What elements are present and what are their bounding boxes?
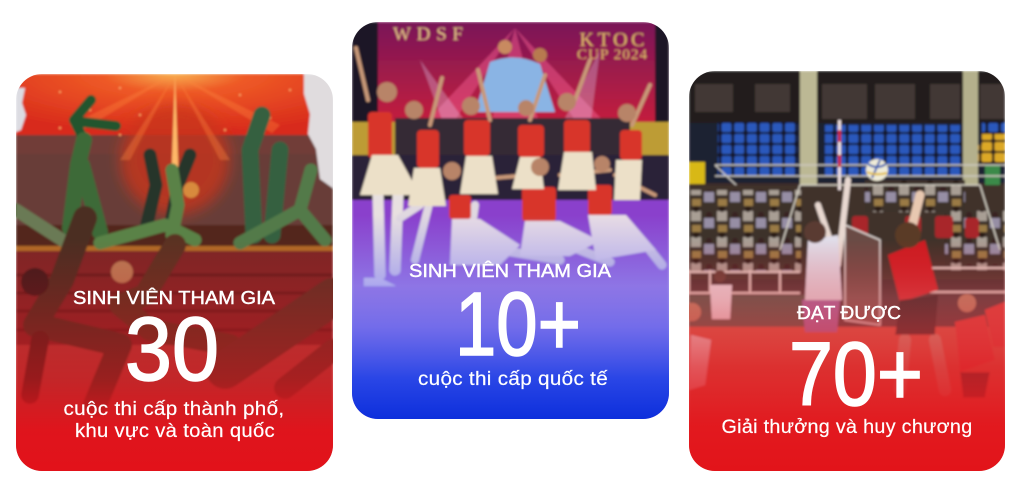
overlay: red gradient xyxy=(689,240,1005,471)
photo: dance team in front of screen: CUP 2024 xyxy=(577,47,648,63)
description: awards and medals: Giải thưởng và huy chương xyxy=(722,417,972,438)
description second line: khu vực và toàn quốc xyxy=(75,421,275,442)
description: city, regional and national: cuộc thi cấp thành phố, xyxy=(64,399,284,420)
dancers standing xyxy=(356,48,662,275)
description: international competitions: cuộc thi cấp quốc tế xyxy=(418,369,608,390)
overlay: blue gradient xyxy=(352,215,669,419)
number: 10+: 10+ xyxy=(455,275,581,375)
photo: dancers on stage xyxy=(16,74,334,471)
photo: dance team in front of screen xyxy=(352,22,669,419)
panel: card 2 international competitions xyxy=(352,22,669,419)
panel: card 1 city and national competitions xyxy=(16,74,334,471)
panel: card 3 awards and medals xyxy=(683,71,1005,471)
volleyball xyxy=(866,159,888,181)
number: 70+: 70+ xyxy=(789,325,923,425)
heading: sinh vien tham gia: SINH VIÊN THAM GIA xyxy=(73,288,275,308)
photo: dance team in front of screen: WDSF xyxy=(393,24,463,45)
heading: sinh vien tham gia: SINH VIÊN THAM GIA xyxy=(409,261,611,281)
photo: dance team in front of screen: KTOC xyxy=(580,29,644,51)
overlay: red gradient xyxy=(16,240,333,471)
photo: volleyball match xyxy=(683,71,1005,471)
heading: dat duoc: ĐẠT ĐƯỢC xyxy=(797,303,901,323)
number: 30: 30 xyxy=(125,300,219,400)
